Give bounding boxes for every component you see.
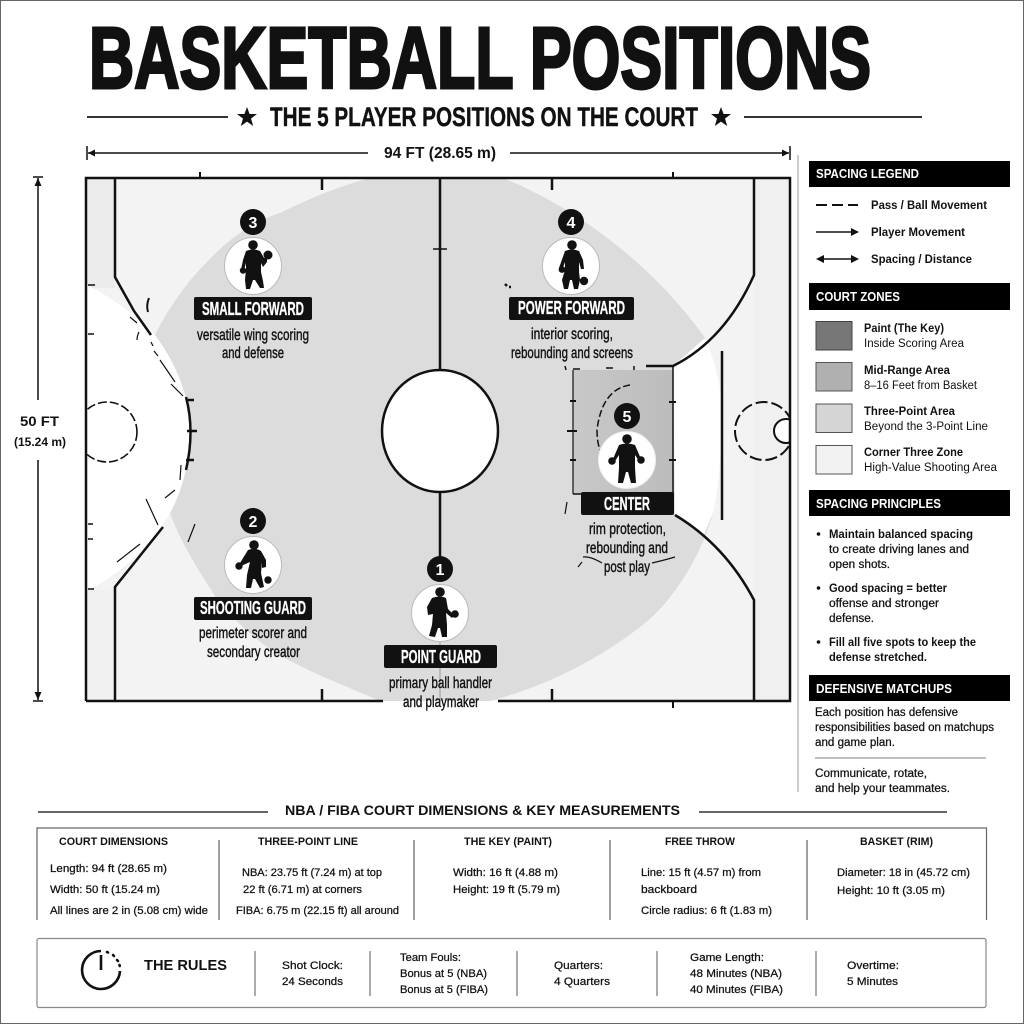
text: responsibilities: Each position has defensive [815,707,958,719]
description: small forward: versatile wing scoring [197,327,309,344]
principle 1: open shots. [829,559,890,571]
column: court dimensions [50,836,208,917]
text: responsibilities [815,707,994,749]
number badge 2: 2 [249,514,258,531]
legend: player movement: Player Movement [871,227,965,239]
label: point guard: POINT GUARD [401,647,481,667]
column: free throw: backboard [641,884,697,896]
zone: paint: Inside Scoring Area [864,338,965,350]
number badge 4 [558,209,584,235]
zone: three-point: Beyond the 3-Point Line [864,421,988,433]
column: the key: Height: 19 ft (5.79 m) [453,884,560,896]
panel: spacing legend [809,161,1010,266]
icon: shooting guard silhouette [224,536,282,594]
label: center [581,492,674,515]
number badge 2 [240,508,266,534]
label: small forward [194,297,312,320]
column: basket: Diameter: 18 in (45.72 cm) [837,867,970,879]
column: free throw [641,836,772,917]
label: shooting guard [194,597,312,620]
dimension: court length [87,145,790,162]
heading: spacing principles: SPACING PRINCIPLES [816,496,941,511]
key dashed curve [597,385,630,450]
dimension: court length: 94 FT (28.65 m) [384,145,496,162]
label: shooting guard: SHOOTING GUARD [200,598,306,618]
rule: shot clock [282,960,344,988]
heading: spacing legend: SPACING LEGEND [816,166,919,181]
text: communicate [815,768,950,795]
player 5: center [581,403,674,576]
number badge 5: 5 [623,409,632,426]
principle 1 [817,529,973,571]
legend: pass: Pass / Ball Movement [871,200,987,212]
heading: defensive matchups: DEFENSIVE MATCHUPS [816,681,952,696]
label: power forward: POWER FORWARD [518,298,625,318]
panel: spacing principles [809,490,1010,664]
heading: the rules: THE RULES [144,957,227,974]
column: free throw: Circle radius: 6 ft (1.83 m) [641,905,772,917]
column: three-point line: NBA: 23.75 ft (7.24 m) at top [242,867,382,879]
principle 1: Maintain balanced spacing [829,529,973,541]
rule: shot clock: Shot Clock: [282,960,343,972]
description: center: post play [604,559,650,576]
zone: corner three: High-Value Shooting Area [864,462,998,474]
rule: quarters [554,960,611,988]
rule: shot clock: 24 Seconds [282,976,344,988]
zone: mid-range [816,362,978,392]
description: shooting guard [199,625,307,661]
rule: overtime: Overtime: [847,960,899,972]
principle 2 [817,583,948,625]
heading: spacing legend [809,161,1010,187]
icon: clock [82,951,120,989]
rule: quarters: Quarters: [554,960,603,972]
rule: team fouls: Team Fouls: [400,952,461,964]
column: the key [453,836,560,896]
heading: court zones: COURT ZONES [816,289,900,304]
principle 3: defense stretched. [829,652,927,664]
number badge 1: 1 [436,562,445,579]
description: shooting guard: perimeter scorer and [199,625,307,642]
player 3: small forward [194,209,312,362]
rule: team fouls: Bonus at 5 (FIBA) [400,984,488,996]
dimension: court width: 50 FT [20,413,59,429]
legend: spacing distance [816,254,972,266]
zone: three-point: Three-Point Area [864,406,956,418]
stray sketch marks [117,284,675,567]
icon: power forward silhouette [542,238,600,294]
description: point guard [389,675,492,711]
number badge 3: 3 [249,215,258,232]
panel: measurements table [37,828,986,920]
column: three-point line [236,836,399,917]
number badge 3 [240,209,266,235]
description: center: rim protection, [589,521,666,538]
column: three-point line: THREE-POINT LINE [258,836,358,848]
rule: game length [690,952,783,996]
column: the key: THE KEY (PAINT) [464,836,552,848]
column: court dimensions: All lines are 2 in (5.08 cm) wide [50,905,208,917]
label: small forward: SMALL FORWARD [202,299,304,319]
rule: quarters: 4 Quarters [554,976,611,988]
dimension: court width [14,177,66,701]
player 4: power forward [509,209,634,362]
column: basket: Height: 10 ft (3.05 m) [837,885,945,897]
zone: corner three: Corner Three Zone [864,447,963,459]
dimension: court width: (15.24 m) [14,435,66,449]
number badge 5 [614,403,640,429]
column: free throw: FREE THROW [665,836,736,848]
sidebar divider [797,155,799,792]
principle 3: Fill all five spots to keep the [829,637,976,649]
text: communicate: and help your teammates. [815,783,950,795]
panel: court [77,172,798,708]
principle 2: defense. [829,613,874,625]
text: communicate: Communicate, rotate, [815,768,927,780]
column: three-point line: 22 ft (6.71 m) at corners [243,884,362,896]
description: point guard: primary ball handler [389,675,492,692]
rule: team fouls [400,952,488,996]
court lines [86,172,790,708]
rule: overtime: 5 Minutes [847,976,899,988]
column: court dimensions: Length: 94 ft (28.65 m) [50,863,167,875]
label: point guard [384,645,497,668]
legend: spacing distance: Spacing / Distance [871,254,972,266]
principle 2: Good spacing = better [829,583,948,595]
zone: paint [816,322,965,350]
principle 3 [817,637,976,664]
panel: defensive matchups [809,675,1010,795]
description: center: rebounding and [586,540,668,557]
zone: mid-range: Mid-Range Area [864,365,951,377]
rule: game length: 48 Minutes (NBA) [690,968,782,980]
text: responsibilities: and game plan. [815,737,895,749]
label: power forward [509,297,634,320]
description: power forward: interior scoring, [531,326,613,343]
zone: corner three [816,446,998,474]
number badge 1 [427,556,453,582]
zone: three-point [816,404,988,433]
column: basket [837,836,970,897]
player 1: point guard [384,556,497,711]
number badge 4: 4 [567,215,576,232]
column: free throw: Line: 15 ft (4.57 m) from [641,867,761,879]
panel: court zones [809,283,1010,474]
description: power forward [511,326,633,362]
text: responsibilities: responsibilities based on matchups [815,722,994,734]
principle 1: to create driving lanes and [829,544,969,556]
description: point guard: and playmaker [403,694,479,711]
subtitle: THE 5 PLAYER POSITIONS ON THE COURT [270,102,698,132]
panel: the rules [37,938,986,1008]
heading: spacing principles [809,490,1010,516]
icon: small forward silhouette [224,238,282,294]
description: small forward: and defense [222,345,284,362]
rule: overtime [847,960,899,988]
column: three-point line: FIBA: 6.75 m (22.15 ft) all around [236,905,399,917]
principle 2: offense and stronger [829,598,939,610]
description: center [586,521,668,576]
column: court dimensions: Width: 50 ft (15.24 m) [50,884,160,896]
heading: defensive matchups [809,675,1010,701]
court floor and zones [77,178,798,701]
zone: paint: Paint (The Key) [864,323,944,335]
heading: court zones [809,283,1010,310]
description: power forward: rebounding and screens [511,345,633,362]
heading: court dimensions: NBA / FIBA COURT DIMENSIONS & KEY MEASUREMENTS [285,802,680,818]
rule: game length: 40 Minutes (FIBA) [690,984,783,996]
player 2: shooting guard [194,508,312,661]
subtitle [87,102,922,132]
column: court dimensions: COURT DIMENSIONS [59,836,168,848]
legend: player movement [816,227,965,239]
icon: center silhouette [598,432,656,488]
column: basket: BASKET (RIM) [860,836,933,848]
description: shooting guard: secondary creator [207,644,300,661]
icon: point guard silhouette [412,584,468,642]
rule: team fouls: Bonus at 5 (NBA) [400,968,487,980]
zone: mid-range: 8–16 Feet from Basket [864,380,978,392]
label: center: CENTER [604,494,650,514]
description: small forward [197,327,309,362]
column: the key: Width: 16 ft (4.88 m) [453,867,558,879]
rule: game length: Game Length: [690,952,764,964]
